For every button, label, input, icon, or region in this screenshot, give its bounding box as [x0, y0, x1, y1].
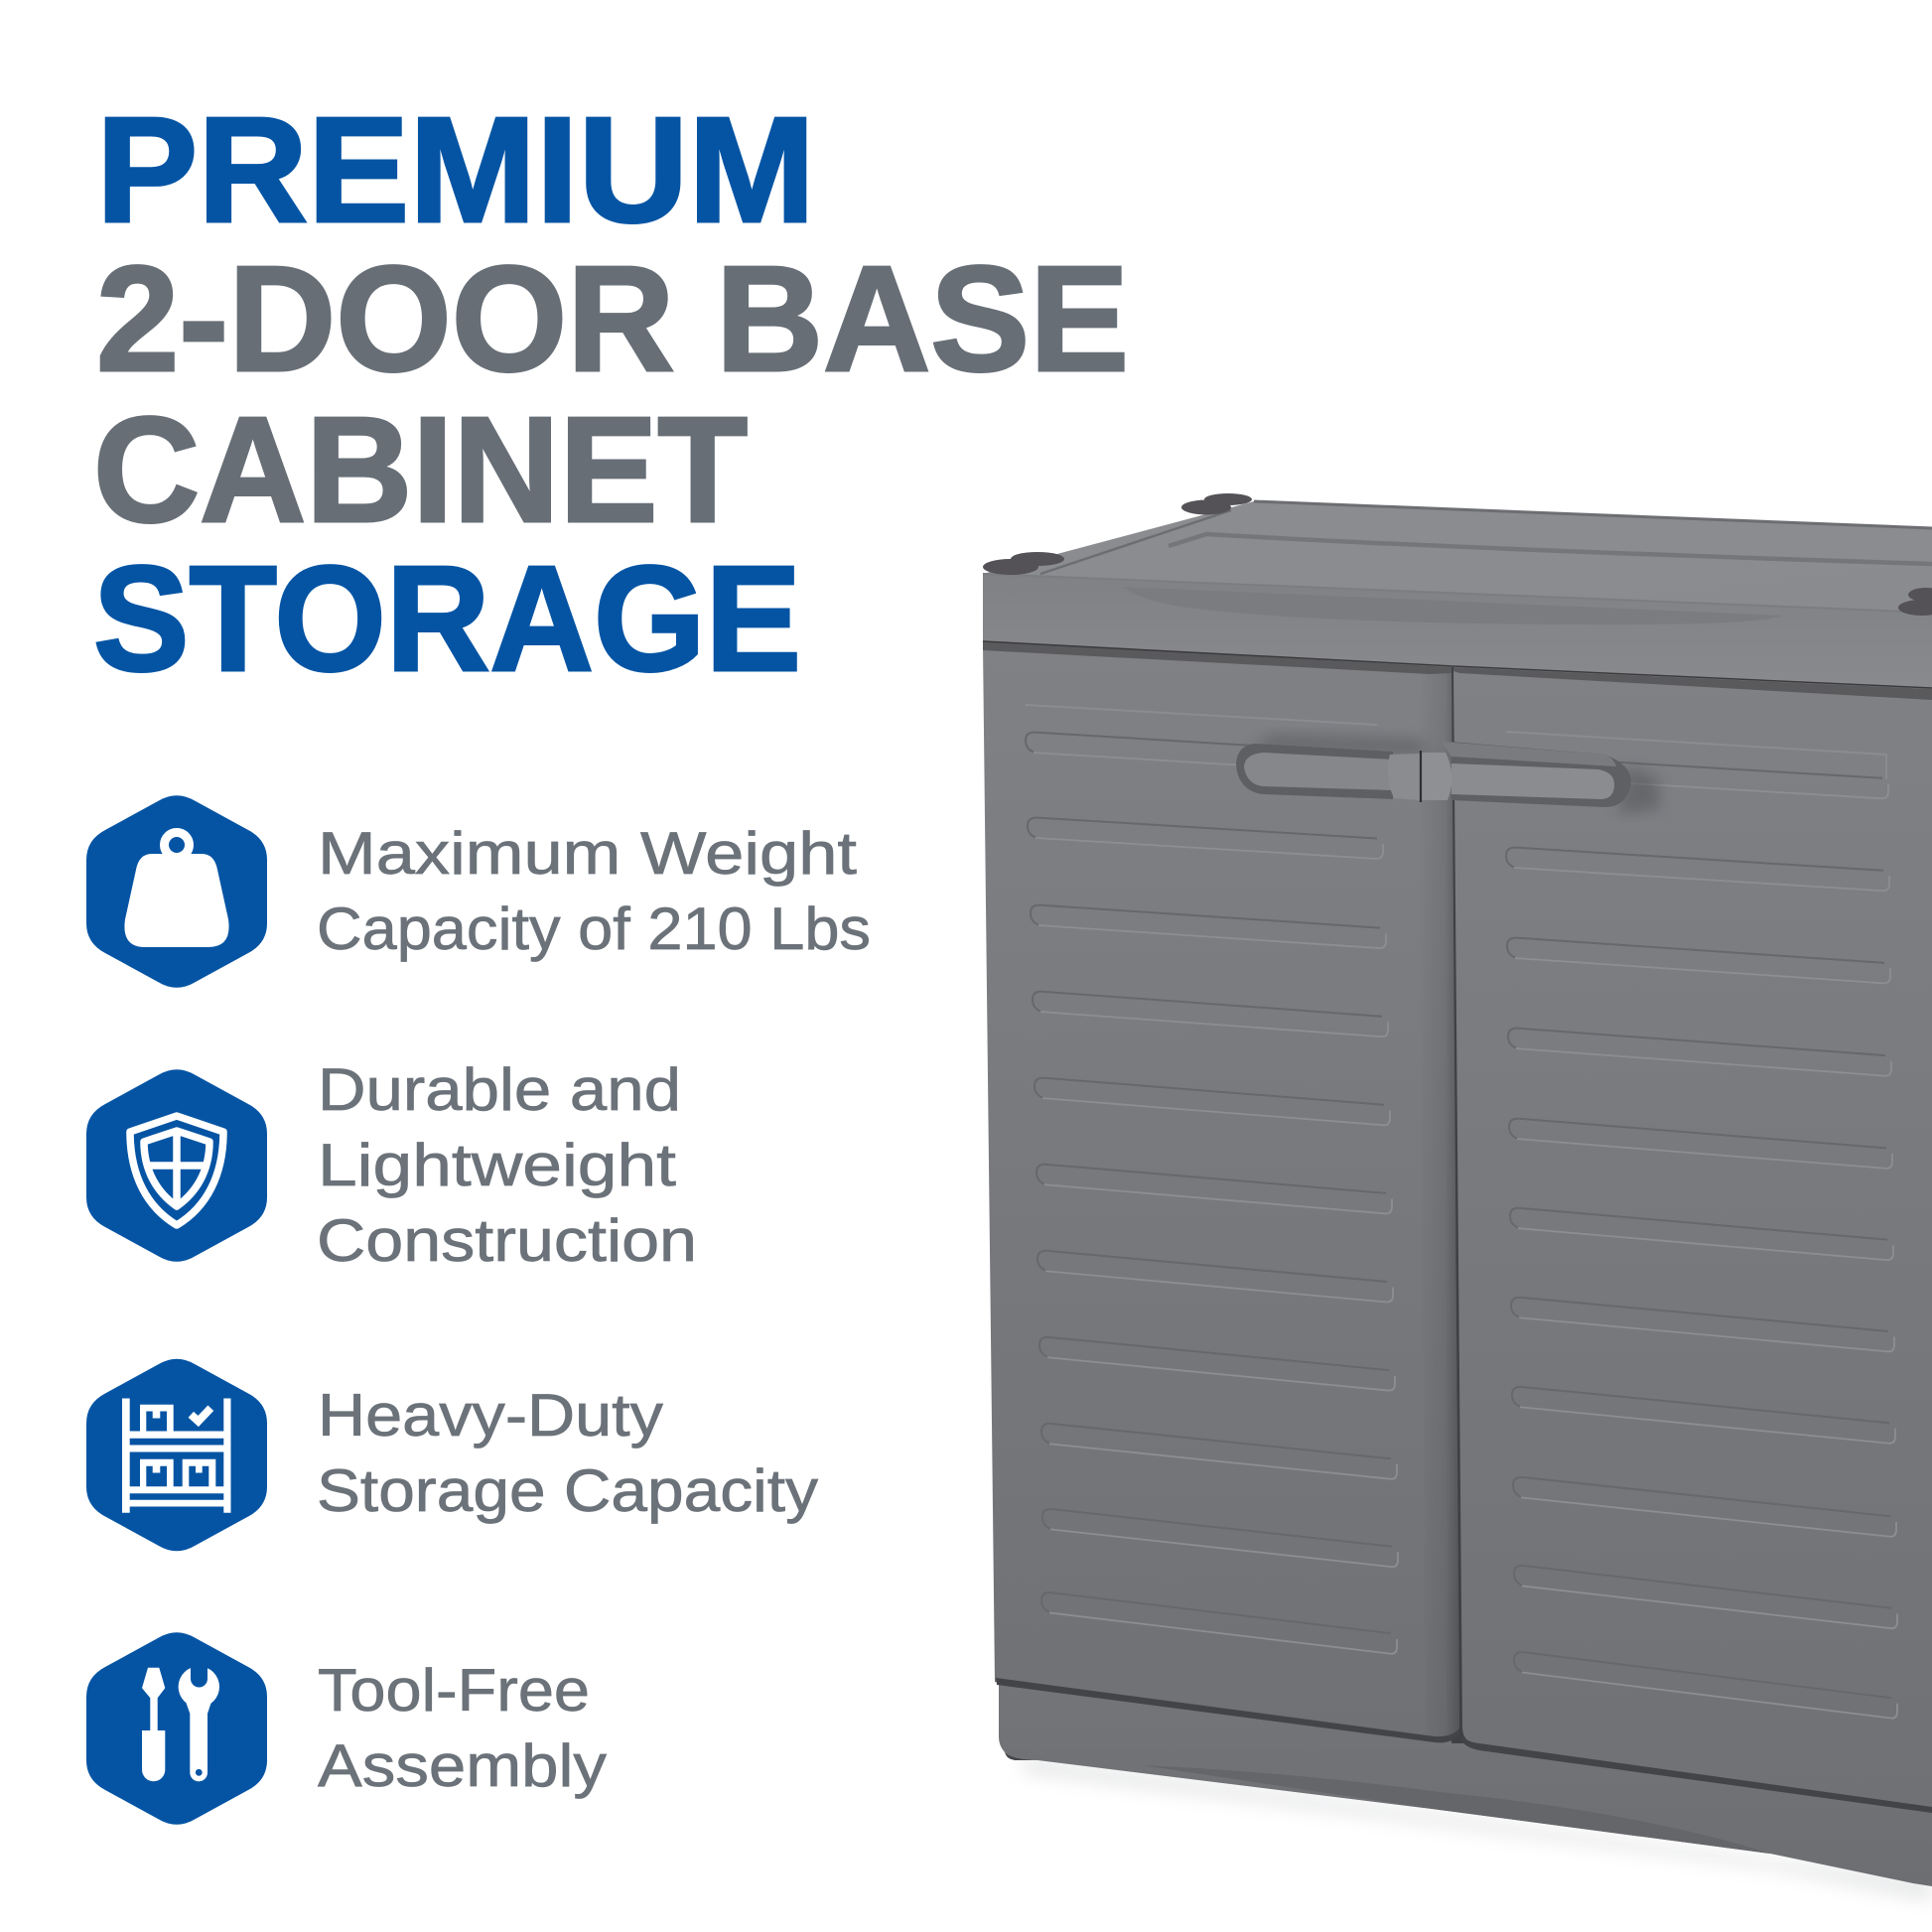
title line: STORAGE: STORAGE	[93, 534, 801, 702]
icon: weight	[86, 795, 267, 988]
cabinet door gap	[1445, 660, 1467, 1743]
feature text: construction: Durable and	[318, 1056, 681, 1123]
feature text: storage capacity	[317, 1382, 818, 1524]
feature text: construction	[317, 1056, 697, 1274]
cabinet right door	[1453, 668, 1932, 1809]
cabinet left door	[983, 645, 1459, 1739]
title line: 2-DOOR BASE: 2-DOOR BASE	[96, 234, 1129, 402]
feature text: storage capacity: Storage Capacity	[317, 1457, 818, 1524]
title	[93, 85, 1129, 702]
cabinet base	[999, 1678, 1932, 1886]
feature text: weight capacity: Maximum Weight	[318, 820, 857, 887]
title line: PREMIUM: PREMIUM	[96, 85, 815, 253]
right door ribs	[1505, 732, 1897, 1719]
product image: cabinet	[983, 493, 1932, 1901]
left door ribs	[1026, 705, 1398, 1654]
icon: storage rack	[86, 1359, 267, 1551]
cabinet lower gasket	[996, 1678, 1932, 1813]
cabinet corner caps	[983, 493, 1932, 616]
feature text: storage capacity: Heavy-Duty	[318, 1382, 663, 1449]
title line: CABINET: CABINET	[93, 385, 748, 553]
feature text: assembly: Tool-Free	[318, 1657, 590, 1724]
cabinet lid front	[983, 573, 1932, 689]
feature text: construction: Lightweight	[318, 1132, 676, 1198]
icon: tools	[86, 1632, 267, 1825]
icon: shield	[86, 1069, 267, 1262]
feature text: weight capacity	[317, 820, 871, 962]
feature text: assembly: Assembly	[318, 1732, 607, 1799]
cabinet upper gasket	[983, 641, 1932, 700]
cabinet lid top	[983, 501, 1932, 613]
feature text: weight capacity: Capacity of 210 Lbs	[317, 896, 871, 962]
cabinet handle	[1236, 735, 1660, 814]
feature text: assembly	[318, 1657, 607, 1799]
feature text: construction: Construction	[317, 1207, 697, 1274]
